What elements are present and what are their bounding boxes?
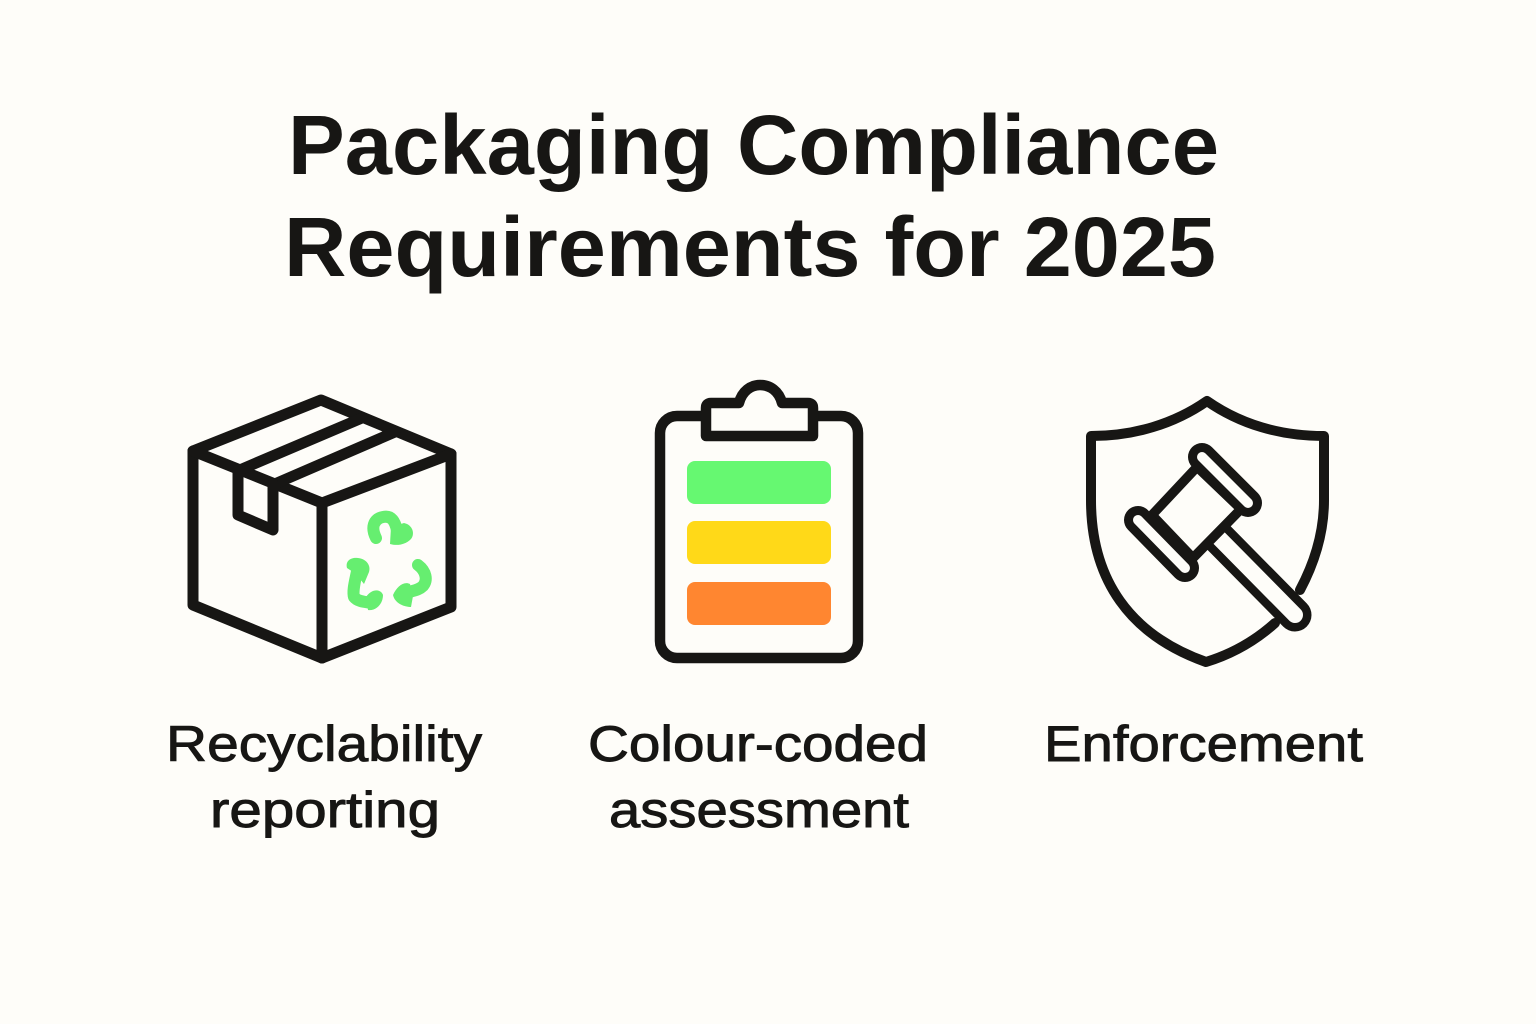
icon: cardboard box with recycling symbol xyxy=(193,400,451,658)
label: Recyclability reporting xyxy=(166,716,482,838)
label: Colour-coded assessment: assessment xyxy=(609,782,909,838)
gavel head xyxy=(1138,457,1248,568)
yellow bar xyxy=(687,521,831,564)
title: Packaging Compliance xyxy=(288,98,1219,192)
panel: colour-coded assessment xyxy=(588,385,928,838)
panel: enforcement xyxy=(1044,401,1363,772)
icon: green recycling arrows xyxy=(347,517,426,610)
label: Recyclability reporting: Recyclability xyxy=(166,716,482,772)
gavel handle xyxy=(1219,538,1295,615)
icon: clipboard with colour bars xyxy=(660,385,858,658)
label: Enforcement: Enforcement xyxy=(1044,716,1363,772)
title: Requirements for 2025 xyxy=(284,200,1216,294)
orange bar xyxy=(687,582,831,625)
label: Colour-coded assessment: Colour-coded xyxy=(588,716,928,772)
label: Recyclability reporting: reporting xyxy=(210,782,440,838)
label: Colour-coded assessment xyxy=(588,716,928,838)
green bar xyxy=(687,461,831,504)
icon: shield with gavel xyxy=(1091,401,1324,662)
panel: recyclability reporting xyxy=(166,400,482,838)
title xyxy=(284,98,1219,294)
